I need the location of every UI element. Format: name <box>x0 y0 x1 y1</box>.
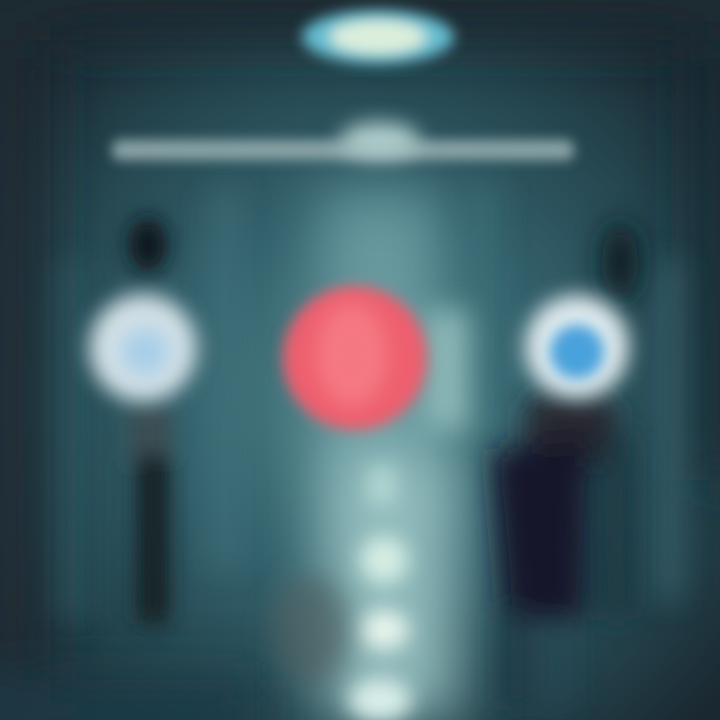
vertical wall streaks <box>60 180 681 620</box>
lower light markers <box>348 465 412 720</box>
left figure <box>128 217 172 625</box>
right circle icon <box>525 295 629 399</box>
central light column <box>320 190 460 720</box>
left circle icon <box>89 294 197 402</box>
central light panel <box>425 310 470 430</box>
right figure <box>490 222 638 710</box>
title text bar <box>112 122 574 160</box>
floor shadow <box>270 575 350 685</box>
central red circle <box>283 286 427 430</box>
top badge <box>302 10 454 64</box>
